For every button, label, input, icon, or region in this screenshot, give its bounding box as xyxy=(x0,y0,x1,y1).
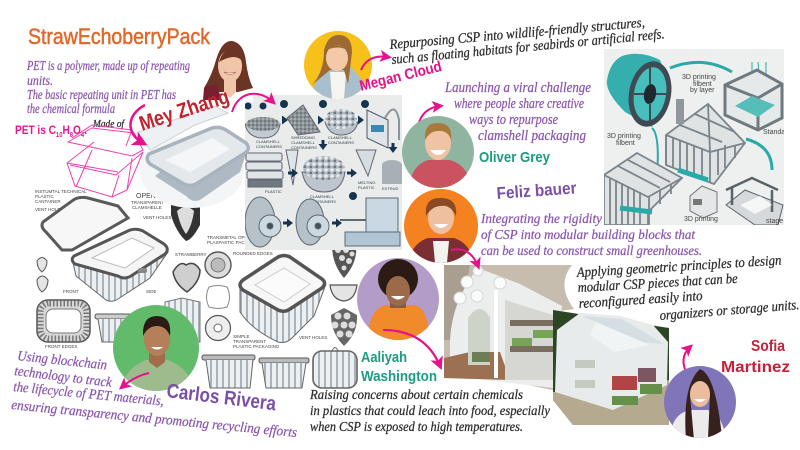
name: Megan Cloud: Megan Cloud xyxy=(358,58,443,95)
sketch sheet: technical clamshell drawings xyxy=(35,189,357,388)
text block: viral challenge: Launching a viral challenge xyxy=(444,80,591,96)
arrow: Mey to clamshell xyxy=(130,105,145,143)
text block: geometric principles xyxy=(575,254,800,324)
chemical formula label: H xyxy=(62,123,70,137)
step arrows xyxy=(283,120,393,223)
name: Aaliyah Washington xyxy=(361,349,437,385)
text block: modular greenhouses: can be used to construct small greenhouses. xyxy=(481,244,702,259)
arrow: Sofia to text xyxy=(683,347,690,376)
diagram labels: filbent xyxy=(616,140,635,147)
sketch: berry bottom xyxy=(331,308,357,346)
process labels: CONTAINERS xyxy=(291,145,317,150)
diagram labels: by layer xyxy=(690,87,715,94)
sketch: labels: VENT HOLES xyxy=(143,215,171,220)
plastic filament machine xyxy=(286,109,402,185)
sketch: labels: ROUNDED EDGES xyxy=(233,251,273,256)
small printer box xyxy=(690,186,717,218)
sketch: labels: INSTUMTAL TECHNICAL xyxy=(35,189,87,194)
name: Sofia Martinez: Martinez xyxy=(721,359,790,376)
sketch: labels: OPEN xyxy=(136,193,156,200)
text block: blockchain tracking: Using blockchain xyxy=(17,349,108,373)
process labels: CONTAINERS xyxy=(256,144,282,149)
sketch: front view crate xyxy=(37,300,90,342)
greenhouse frame lower xyxy=(604,153,682,225)
text block: viral challenge: clamshell packaging xyxy=(478,128,586,144)
sketch: labels: SIMPLE xyxy=(233,334,250,339)
arrow: Megan to text xyxy=(361,57,388,70)
teal arrows xyxy=(652,62,772,175)
chemical formula label: 8 xyxy=(70,132,73,139)
text block: chemical concerns xyxy=(309,388,551,435)
text block: modular greenhouses: Integrating the rigidity xyxy=(480,212,603,227)
step badges xyxy=(244,100,369,200)
sketch: labels: CANTAINER xyxy=(35,199,61,204)
name: Sofia Martinez xyxy=(721,338,790,376)
process labels: PLASTIC xyxy=(265,189,282,194)
icon: pink wireframe container xyxy=(67,125,143,197)
diagram labels: filbent xyxy=(693,81,712,88)
panel: recycling process sketch xyxy=(244,95,402,250)
sketch: labels: TRANSMETAL OPEN xyxy=(207,235,251,240)
photo: second greenhouse xyxy=(553,310,669,425)
title: StrawEchoberryPack xyxy=(28,24,211,49)
sketch: crate behind portrait xyxy=(165,298,200,342)
text block: PET definition: The basic repeating unit in PET has xyxy=(27,88,176,103)
arrow: Oliver to text xyxy=(418,106,440,126)
diagram labels: 3D printing xyxy=(607,133,641,140)
text block: viral challenge: ways to repurpose xyxy=(469,112,558,128)
arrow: Aaliyah to greenhouse xyxy=(383,330,440,366)
name: Sofia Martinez: Sofia xyxy=(751,338,785,355)
filament spool xyxy=(606,54,672,127)
name: Aaliyah Washington: Aaliyah xyxy=(361,349,407,366)
sketch: open clamshell xyxy=(42,197,168,301)
text block: PET definition: the chemical formula xyxy=(27,102,115,117)
sketch: labels: VENT HOLES xyxy=(299,335,327,340)
sketch: bottom crate left xyxy=(202,355,255,388)
sketch: labels: PLASTIC PACKAGING xyxy=(233,344,280,349)
filament spools xyxy=(245,197,329,247)
sketch: side view crate xyxy=(95,314,131,342)
panel: 3D printing illustration xyxy=(604,49,785,225)
sketch: heart strawberry xyxy=(173,263,200,292)
diagram labels: stage xyxy=(766,218,783,225)
sketch: lower round view xyxy=(206,316,230,340)
portrait: Oliver Grey xyxy=(402,116,474,188)
process labels: CLAMSHELL xyxy=(291,140,316,145)
printer top xyxy=(725,70,782,130)
text block: PET definition: units. xyxy=(27,74,53,89)
diagram labels: 3D printing xyxy=(684,216,718,223)
portrait: Megan Cloud xyxy=(304,31,372,99)
portrait: Mey Zhang xyxy=(203,41,253,102)
sketch: strawberry cross section xyxy=(171,190,200,241)
sketch: small strawberries xyxy=(37,258,48,292)
arrow: Carlos to text xyxy=(122,373,149,387)
portrait: Sofia Martinez xyxy=(664,366,737,440)
process labels: CLAMSHELL xyxy=(256,139,281,144)
text block: chemical concerns: Raising concerns about certain chemicals xyxy=(309,388,523,403)
process labels: PLASTIC xyxy=(358,185,375,190)
sketch: rounded square view xyxy=(206,286,230,308)
process labels: CONTAINERS xyxy=(328,140,354,145)
sketch: labels: PLASTIC xyxy=(35,194,55,199)
text block: wildlife structures: such as floating habitats for seabirds or artificial reefs. xyxy=(391,27,665,68)
illustration: clear clamshell xyxy=(138,106,248,208)
text block: blockchain tracking: the lifecycle of PET materials, xyxy=(13,380,164,409)
text block: modular greenhouses xyxy=(480,212,702,259)
chemical formula label: 10 xyxy=(56,132,63,139)
text block: chemical concerns: in plastics that could leach into food, especially xyxy=(310,404,551,419)
process labels: CLAMSHELL xyxy=(310,194,335,199)
sketch: labels: FRONT xyxy=(63,289,79,294)
text block: blockchain tracking: ensuring transparency and promoting recycling efforts xyxy=(11,398,298,441)
diagram labels xyxy=(607,74,785,225)
sketch: labels: PLASPASTIC PACKAGING xyxy=(207,240,263,245)
sketch: labels: TRANSPARENT xyxy=(233,339,266,344)
text block: geometric principles: modular CSP pieces that can be xyxy=(577,272,738,296)
chemical formula label: . xyxy=(84,123,87,137)
text block: geometric principles: Applying geometric principles to design xyxy=(575,254,782,281)
chemical formula label: 4 xyxy=(81,132,84,139)
extruder xyxy=(340,198,400,246)
process labels: MELTING xyxy=(358,180,375,185)
chimney xyxy=(676,99,684,124)
bowls of plastic xyxy=(245,105,358,192)
text block: viral challenge xyxy=(444,80,591,144)
process labels: CONTAINERS xyxy=(310,199,336,204)
sketch: bottom crate middle xyxy=(259,358,309,388)
portrait: Carlos Rivera xyxy=(113,305,199,391)
name: Carlos Rivera: Carlos Rivera xyxy=(165,380,278,415)
sketch: berry top xyxy=(332,239,356,278)
greenhouse frame centre xyxy=(666,104,745,184)
sketch: labels: STRAWBERRY xyxy=(175,252,207,257)
text block: blockchain tracking xyxy=(11,349,298,441)
arrow: Felix to greenhouse xyxy=(451,249,478,266)
text block: geometric principles: reconfigured easily into xyxy=(578,289,703,312)
text block: modular greenhouses: of CSP into modular building blocks that xyxy=(481,228,696,243)
name: Feliz Bauer: Feliz bauer xyxy=(496,178,577,203)
text block: viral challenge: where people share creative xyxy=(454,96,584,112)
text block: blockchain tracking: technology to track xyxy=(14,364,113,391)
sketch: labels: SIDE xyxy=(146,289,157,294)
process labels xyxy=(256,135,399,204)
sketch: labels: VENT HOLES xyxy=(35,207,63,212)
portrait: Felix Bauer xyxy=(404,189,478,263)
diagram labels: 3D printing xyxy=(682,74,716,81)
stacked clamshells xyxy=(246,153,283,187)
sketch: half berry xyxy=(330,285,357,301)
sketch: labels: TRANSPARENT xyxy=(131,200,164,205)
name: Mey Zhang: Mey Zhang xyxy=(136,85,232,136)
text block: chemical concerns: when CSP is exposed to high temperatures. xyxy=(310,420,523,435)
sketch: labels: FRONT EDGES xyxy=(45,344,77,349)
diagram labels: Standa xyxy=(763,129,785,136)
portrait: Aaliyah Washington xyxy=(357,258,440,341)
text block: PET definition: PET is a polymer, made up of repeating xyxy=(26,59,190,74)
printer bottom xyxy=(726,178,783,225)
sketch: big open crate xyxy=(240,256,326,342)
name: Oliver Grey: Oliver Grey xyxy=(479,149,551,166)
chemical formula label: O xyxy=(73,123,81,137)
sketch: labels: CLAMSHELLE xyxy=(132,205,162,210)
photo: first greenhouse xyxy=(444,265,574,390)
process labels: EXTRUD xyxy=(382,186,399,191)
sketch: round top view xyxy=(205,252,231,278)
made of label: Made of xyxy=(92,119,125,130)
arrow: Mey to process xyxy=(232,94,273,112)
sketch: bottom crate right xyxy=(313,348,357,388)
name: Aaliyah Washington: Washington xyxy=(361,368,437,385)
sketch: labels xyxy=(35,189,327,349)
process labels: SHREDDING xyxy=(291,135,315,140)
chemical formula label: PET is C xyxy=(15,123,64,137)
process labels: CLAMSHELL xyxy=(328,135,353,140)
text block: wildlife structures: Repurposing CSP into wildlife-friendly structures, xyxy=(388,16,645,53)
text block: PET definition xyxy=(26,59,190,117)
